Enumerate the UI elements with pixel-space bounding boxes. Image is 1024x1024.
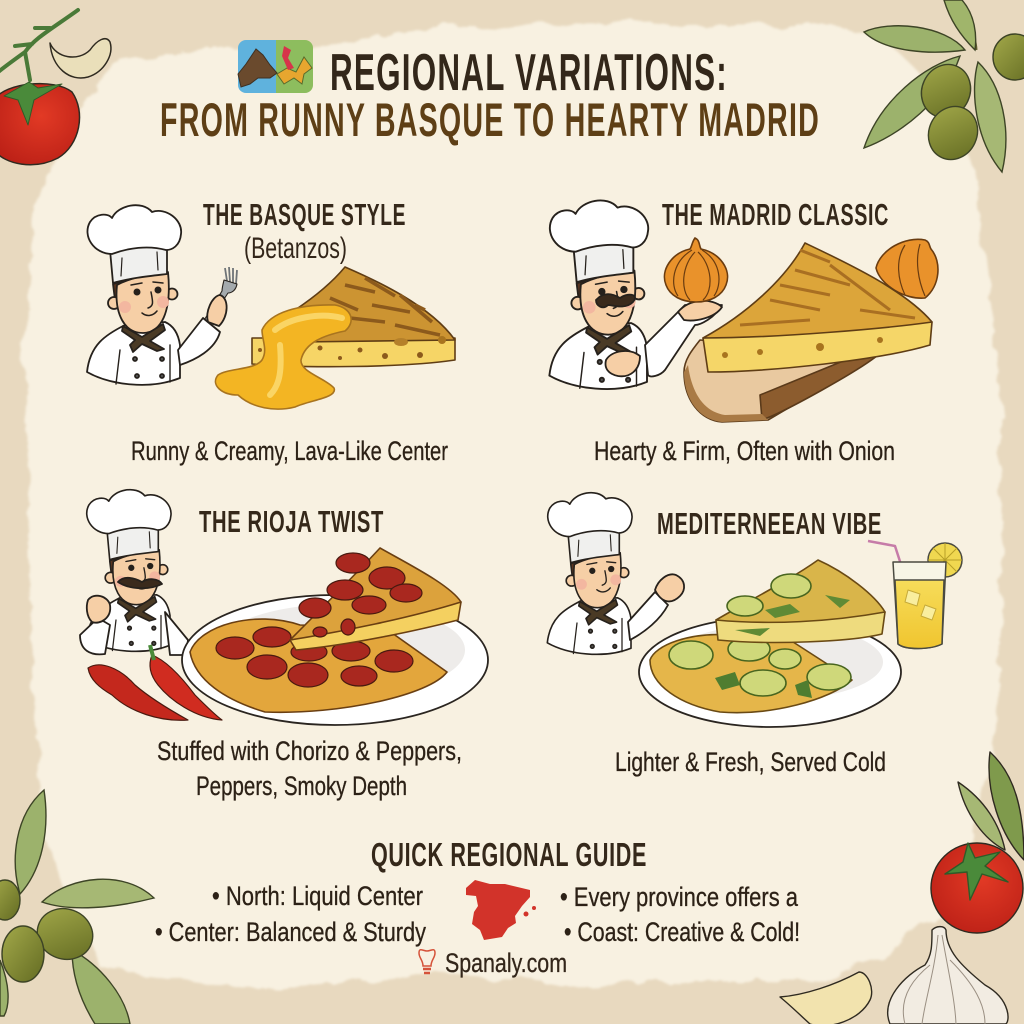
panel: Mediterranean vibe [547, 493, 962, 777]
chef waving [547, 493, 684, 654]
title [160, 44, 820, 146]
panel: Rioja twist [80, 490, 488, 801]
caption: Rioja [157, 736, 462, 801]
corner decoration: tomato, garlic, leaves bottom-right [780, 752, 1024, 1024]
chef with fist [80, 490, 188, 655]
heading: Basque [203, 197, 406, 265]
tortilla with zucchini [650, 635, 852, 713]
caption: Rioja: Stuffed with Chorizo & Peppers, [157, 736, 462, 766]
plate [639, 617, 901, 727]
caption: Basque: Runny & Creamy, Lava-Like Center [131, 436, 448, 466]
tomato [931, 843, 1023, 933]
caption: Mediterranean: Lighter & Fresh, Served Cold [615, 747, 886, 777]
garlic clove [780, 972, 872, 1024]
left bullet list: • North: Liquid Center [212, 881, 423, 911]
icon: light bulb [419, 950, 435, 973]
olives [0, 880, 100, 982]
title icon: regional map badge [238, 40, 313, 93]
right bullet list: • Coast: Creative & Cold! [564, 917, 800, 947]
corner decoration: olive branch top-right [864, 0, 1024, 172]
caption: Madrid: Hearty & Firm, Often with Onion [594, 436, 895, 466]
chef with onion [549, 200, 722, 389]
right bullet list [560, 882, 800, 947]
heading: Mediterranean: MEDITERNEEAN VIBE [657, 506, 882, 541]
heading: Rioja: THE RIOJA TWIST [199, 504, 384, 539]
garlic bulb [888, 927, 1008, 1024]
tomato [0, 84, 80, 165]
chili peppers [88, 645, 222, 720]
heading: guide: QUICK REGIONAL GUIDE [371, 836, 647, 873]
olives [913, 34, 1024, 168]
lava egg [215, 305, 351, 409]
tortilla wedge [703, 243, 932, 372]
heading: Madrid: THE MADRID CLASSIC [662, 197, 889, 232]
left bullet list: • Center: Balanced & Sturdy [155, 917, 426, 947]
caption: Rioja: Peppers, Smoky Depth [196, 771, 407, 801]
corner decoration: tomato and garlic top-left [0, 10, 111, 165]
heading: Basque: THE BASQUE STYLE [203, 197, 406, 232]
panel: Basque style [87, 197, 455, 466]
website: Spanaly.com [445, 948, 567, 978]
tortilla top wedge [290, 548, 461, 650]
tortilla top wedge [716, 560, 885, 642]
panel: quick regional guide [155, 836, 800, 978]
onion held [664, 238, 728, 302]
chef with fork [87, 205, 237, 385]
right bullet list: • Every province offers a [560, 882, 799, 912]
vine [0, 10, 78, 80]
tortilla with runny center [215, 267, 455, 409]
garlic clove [50, 39, 111, 78]
tortilla with chorizo [190, 619, 447, 712]
panel: Madrid classic [549, 197, 938, 466]
plate [182, 595, 488, 725]
map of Spain [466, 880, 536, 940]
corner decoration: olive branch bottom-left [0, 790, 154, 1024]
lemonade glass [868, 541, 962, 648]
heading: Basque: (Betanzos) [244, 232, 347, 265]
bread slice [684, 340, 878, 422]
onion behind [876, 239, 938, 298]
title: REGIONAL VARIATIONS: [330, 44, 728, 102]
left bullet list [155, 881, 426, 947]
